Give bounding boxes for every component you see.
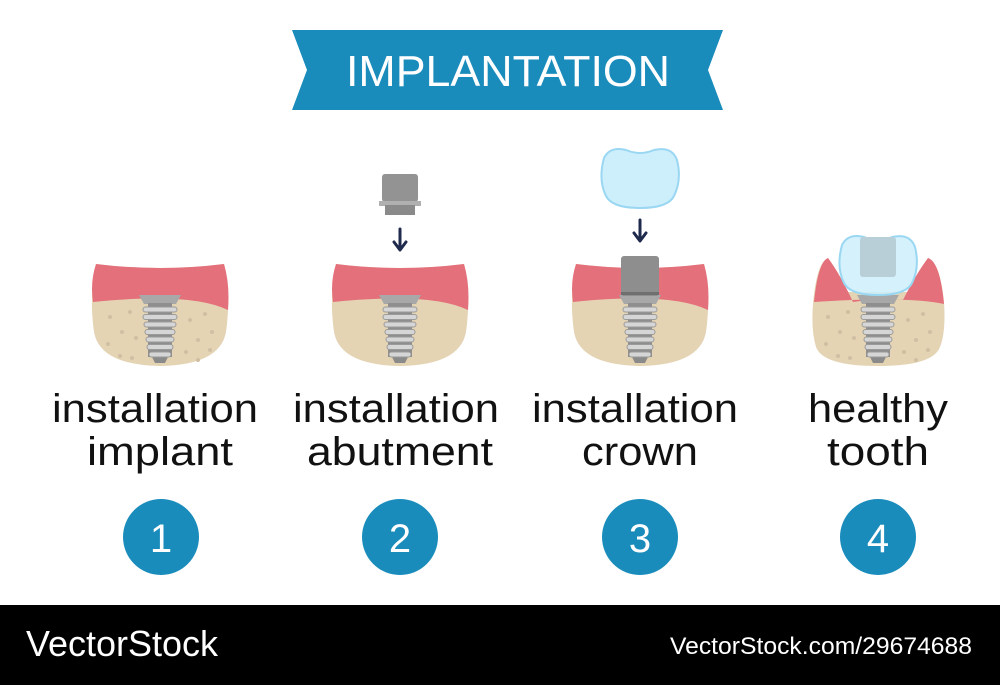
label 3: installation [532, 387, 738, 431]
abutment [379, 174, 421, 215]
label 3: crown [582, 430, 698, 474]
label 4: tooth [827, 430, 929, 474]
footer bar: VectorStock [26, 623, 219, 664]
crown [601, 149, 679, 208]
label 1: installation [52, 387, 258, 431]
footer bar [0, 605, 1000, 685]
number 1 [123, 499, 199, 575]
number 4 [840, 499, 916, 575]
arrow [634, 220, 646, 241]
number 3 [602, 499, 678, 575]
step 1 illustration [92, 264, 229, 366]
number 2 [362, 499, 438, 575]
title banner [292, 30, 723, 110]
step 3 illustration [572, 149, 708, 366]
footer bar: VectorStock.com/29674688 [670, 633, 972, 660]
number 3: 3 [629, 517, 651, 561]
arrow [394, 229, 406, 250]
step 2 illustration [332, 174, 468, 366]
number 1: 1 [150, 517, 172, 561]
number 2: 2 [389, 517, 411, 561]
number 4: 4 [867, 517, 889, 561]
title banner: IMPLANTATION [346, 47, 670, 96]
label 2: installation [293, 387, 499, 431]
label 2: abutment [307, 430, 493, 474]
step 4 illustration [812, 236, 944, 366]
label 4: healthy [808, 387, 948, 431]
label 1: implant [87, 430, 233, 474]
